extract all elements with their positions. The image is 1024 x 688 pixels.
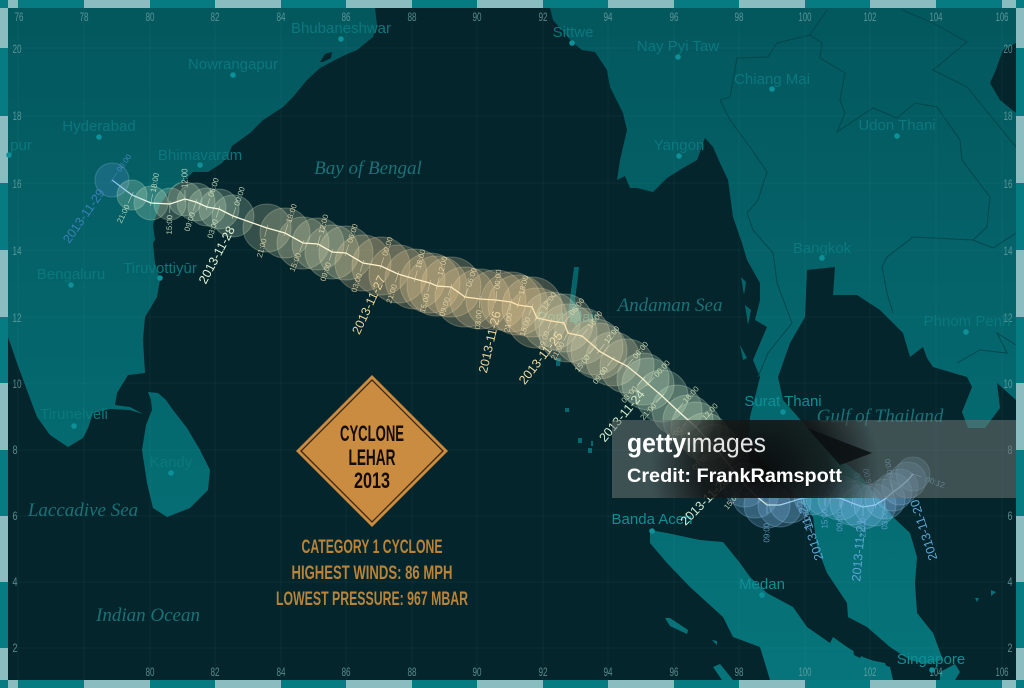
city: Hyderabad: Hyderabad — [62, 118, 136, 135]
longitude and latitude axis labels: 92 — [538, 667, 548, 679]
ticks: Malay segment: 21:00 — [859, 517, 868, 538]
longitude and latitude axis labels: 84 — [276, 12, 286, 24]
land: India — [8, 8, 377, 447]
longitude and latitude axis labels: 12 — [12, 313, 22, 325]
title text — [340, 421, 404, 493]
longitude and latitude axis labels: 80 — [146, 12, 154, 24]
title text: CYCLONE — [340, 421, 404, 446]
ticks: Andaman Sea segment: 15:00 — [573, 353, 592, 374]
watermark credit: Credit: FrankRamspott — [627, 466, 843, 487]
longitude and latitude axis labels: 6 — [1008, 511, 1012, 523]
storm radius circles — [95, 163, 930, 529]
city: Bhubaneshwar: Bhubaneshwar — [291, 20, 391, 37]
longitude and latitude axis labels: 76 — [14, 12, 24, 24]
ticks: Andaman Sea segment: 09:00 — [690, 451, 711, 472]
city: Yangon: Yangon — [654, 137, 704, 154]
sign: cyclone title diamond — [296, 375, 448, 527]
longitude and latitude axis labels: 78 — [80, 12, 88, 24]
cyclone statistics text: CATEGORY 1 CYCLONE — [302, 537, 442, 558]
city: Banda Aceh: Banda Aceh — [612, 511, 692, 528]
ticks: central segment: 21:00 — [502, 312, 514, 333]
ticks: central segment: 21:00 — [384, 283, 399, 304]
longitude and latitude axis labels: 4 — [12, 577, 18, 589]
title text: 2013 — [354, 468, 390, 493]
ticks: western segment: 00:00 — [115, 152, 134, 174]
date labels: 2013-11-26 — [476, 310, 504, 374]
ticks: central segment: 06:00 — [464, 266, 479, 288]
city: Bengaluru: Bengaluru — [37, 266, 105, 283]
cyclone statistics text: HIGHEST WINDS: 86 MPH — [292, 563, 452, 584]
land: Andaman and Nicobar islands — [556, 267, 593, 453]
land: small islands — [665, 277, 996, 680]
longitude and latitude axis labels: 82 — [210, 12, 220, 24]
ticks: Malay segment: 09:00 — [763, 522, 772, 543]
longitude and latitude axis labels: 98 — [734, 667, 744, 679]
longitude and latitude axis labels: 20 — [12, 44, 22, 56]
city: Sittwe: Sittwe — [553, 24, 593, 41]
ticks: central segment: 09:00 — [537, 329, 552, 351]
sea name: Indian Ocean: Indian Ocean — [95, 605, 200, 626]
watermark band — [612, 420, 1016, 498]
ticks: western segment: 06:00 — [206, 176, 221, 198]
longitude and latitude axis labels: 102 — [864, 667, 876, 679]
longitude and latitude axis labels: 14 — [12, 246, 22, 258]
date labels: 2013-11-27 — [349, 273, 389, 337]
land: Sumatra — [650, 530, 893, 680]
ticks: Andaman Sea segment: 00:00 — [652, 358, 672, 379]
cyclone statistics text — [276, 537, 468, 610]
longitude and latitude axis labels: 96 — [670, 12, 678, 24]
land: Sri Lanka — [142, 392, 210, 517]
ticks: central segment: 15:00 — [518, 315, 533, 337]
sea name: Andaman Sea: Andaman Sea — [615, 295, 723, 316]
ticks: central segment: 12:00 — [540, 290, 559, 312]
longitude and latitude axis labels: 10 — [1004, 379, 1012, 391]
date labels: 2013-11-28 — [196, 224, 238, 286]
city: Tirunelveli: Tirunelveli — [40, 406, 108, 423]
ticks: Andaman Sea segment: 12:00 — [700, 401, 720, 422]
city: partially cropped label: pur — [10, 137, 32, 154]
ticks: Andaman Sea segment: 18:00 — [681, 384, 701, 405]
ticks: central segment: 21:00 — [255, 237, 269, 259]
city: Kandy: Kandy — [150, 454, 193, 471]
date labels — [60, 186, 940, 582]
longitude and latitude axis labels: 104 — [930, 667, 943, 679]
time ticks and labels — [107, 152, 946, 543]
longitude and latitude axis labels: 12 — [1004, 313, 1012, 325]
cyclone statistics text: LOWEST PRESSURE: 967 MBAR — [276, 589, 468, 610]
ticks: central segment: 15:00 — [418, 292, 432, 314]
watermark logo: gettyimages — [627, 428, 766, 458]
ticks: western segment — [107, 152, 247, 239]
longitude and latitude axis labels: 16 — [12, 179, 22, 191]
ticks: Andaman Sea segment: 15:00 — [664, 425, 685, 446]
ticks: central segment: 12:00 — [436, 255, 450, 277]
longitude and latitude axis labels: 6 — [12, 511, 18, 523]
ticks: central segment: 00:00 — [380, 235, 395, 257]
title text: LEHAR — [348, 445, 396, 470]
ticks: Andaman Sea segment — [573, 324, 751, 511]
ticks: Malay segment: 09:00 — [836, 511, 845, 532]
longitude and latitude axis labels: 96 — [670, 667, 678, 679]
date labels: 2013-11-29 — [60, 186, 108, 246]
date labels: 2013-11-24 — [596, 387, 648, 445]
city: Chiang Mai: Chiang Mai — [734, 71, 810, 88]
ticks: central segment: 09:00 — [318, 261, 333, 282]
ticks: central segment: 21:00 — [549, 340, 567, 362]
longitude and latitude axis labels: 86 — [342, 12, 350, 24]
longitude and latitude axis labels: 106 — [996, 667, 1008, 679]
date labels: 2013-11-20 — [908, 498, 940, 562]
longitude and latitude axis labels: 102 — [864, 12, 876, 24]
date labels: 2013-11-21 — [849, 518, 869, 582]
city: Tiruvottiyur: Tiruvottiyūr — [123, 260, 197, 277]
ticks: Andaman Sea segment: 03:00 — [619, 384, 640, 405]
longitude and latitude axis labels: 82 — [210, 667, 220, 679]
longitude and latitude axis labels: 20 — [1004, 44, 1012, 56]
longitude and latitude axis labels: 88 — [408, 12, 416, 24]
longitude and latitude axis labels: 8 — [12, 445, 18, 457]
ticks: Andaman Sea segment: 12:00 — [602, 324, 622, 345]
longitude and latitude axis labels: 2 — [12, 643, 18, 655]
city: Medan: Medan — [739, 576, 785, 593]
date labels: 2013-11-22 — [794, 498, 826, 562]
ticks: central segment: 18:00 — [284, 202, 299, 224]
ticks: central segment: 18:00 — [585, 309, 605, 330]
ticks: Andaman Sea segment: 06:00 — [631, 339, 651, 361]
longitude and latitude axis labels: 14 — [1004, 246, 1013, 258]
city: partially cropped label — [6, 137, 32, 158]
longitude and latitude axis labels: 90 — [472, 12, 482, 24]
city: Bhimavaram: Bhimavaram — [158, 147, 242, 164]
city: Nowrangapur: Nowrangapur — [188, 56, 278, 73]
longitude and latitude axis labels: 2 — [1008, 643, 1012, 655]
longitude and latitude axis labels: 88 — [408, 667, 416, 679]
ticks: Andaman Sea segment: 21:00 — [710, 477, 731, 498]
longitude and latitude axis labels: 100 — [798, 12, 812, 24]
longitude and latitude axis labels: 92 — [538, 12, 548, 24]
ticks: central segment — [255, 202, 605, 362]
longitude and latitude axis labels: 16 — [1004, 179, 1012, 191]
ticks: western segment: 03:00 — [205, 218, 220, 239]
ticks: Malay segment: 00:12 — [925, 475, 946, 490]
ticks: Malay segment: 08:00 — [850, 472, 862, 493]
track line — [112, 180, 913, 507]
longitude and latitude axis labels: 18 — [1004, 111, 1012, 123]
city: Surat Thani: Surat Thani — [744, 393, 822, 410]
ticks: Malay segment: 15:00 — [821, 508, 830, 529]
city: Udon Thani: Udon Thani — [858, 117, 936, 134]
date labels: 2013-11-23 — [678, 474, 732, 528]
longitude and latitude axis labels: 106 — [996, 12, 1008, 24]
ticks: western segment: 12:00 — [181, 168, 190, 188]
ticks: central segment: 18:00 — [414, 248, 428, 270]
longitude and latitude axis labels: 94 — [604, 667, 613, 679]
ticks: central segment: 12:00 — [317, 213, 331, 235]
ticks: Andaman Sea segment: 09:00 — [591, 365, 610, 386]
ticks: Malay segment — [763, 458, 946, 543]
ticks: Malay segment: 03:00 — [881, 509, 890, 530]
ticks: central segment: 06:00 — [345, 222, 360, 244]
city: Bangkok: Bangkok — [793, 240, 852, 257]
ticks: Andaman Sea segment: 15:00 — [722, 490, 742, 511]
sea name: Laccadive Sea: Laccadive Sea — [27, 500, 138, 521]
longitude and latitude axis labels: 10 — [12, 379, 22, 391]
longitude and latitude axis labels: 90 — [472, 667, 482, 679]
ticks: Malay segment: 06:00 — [861, 467, 875, 489]
ticks: Andaman Sea segment: 21:00 — [638, 401, 659, 422]
sea name: Gulf of Thailand: Gulf of Thailand — [817, 406, 944, 427]
ticks: western segment: 21:00 — [115, 203, 132, 225]
ticks: western segment: 09:00 — [182, 211, 197, 232]
ticks: central segment: 18:00 — [517, 274, 531, 296]
longitude and latitude axis labels: 104 — [930, 12, 943, 24]
ticks: Malay segment: 21:00 — [801, 510, 813, 532]
ticks: western segment: 18:00 — [149, 172, 161, 193]
ticks: central segment: 03:00 — [473, 309, 484, 330]
longitude and latitude axis labels: 18 — [12, 111, 22, 123]
longitude and latitude axis labels: 94 — [604, 12, 613, 24]
longitude and latitude axis labels: 100 — [798, 667, 812, 679]
ticks: western segment: 15:00 — [165, 214, 174, 235]
ticks: central segment: 00:00 — [493, 269, 503, 289]
longitude and latitude axis labels: 98 — [734, 12, 744, 24]
ticks: central segment: 06:00 — [567, 296, 587, 317]
land: Southeast Asia mainland — [550, 8, 1016, 664]
city: Port Blair: Port Blair — [537, 309, 599, 326]
date labels: 2013-11-25 — [516, 329, 566, 387]
ticks: central segment: 03:00 — [349, 272, 364, 293]
city: Phnom Penh: Phnom Penh — [924, 313, 1010, 330]
sea name: Bay of Bengal: Bay of Bengal — [314, 158, 422, 179]
ticks: western segment: 00:00 — [232, 185, 247, 207]
longitude and latitude axis labels: 86 — [342, 667, 350, 679]
city: Nay Pyi Taw: Nay Pyi Taw — [637, 38, 719, 55]
longitude and latitude axis labels: 4 — [1008, 577, 1013, 589]
longitude and latitude axis labels: 8 — [1008, 445, 1012, 457]
dark water inlets — [320, 43, 1016, 658]
cyclone track — [60, 152, 946, 582]
ticks: Malay segment: 00:00 — [883, 458, 895, 479]
city: Singapore: Singapore — [897, 651, 965, 668]
longitude and latitude axis labels: 80 — [146, 667, 154, 679]
ticks: central segment: 09:00 — [437, 296, 452, 317]
ticks: central segment: 15:00 — [288, 251, 303, 273]
country borders — [720, 10, 1016, 377]
longitude and latitude axis labels: 84 — [276, 667, 286, 679]
